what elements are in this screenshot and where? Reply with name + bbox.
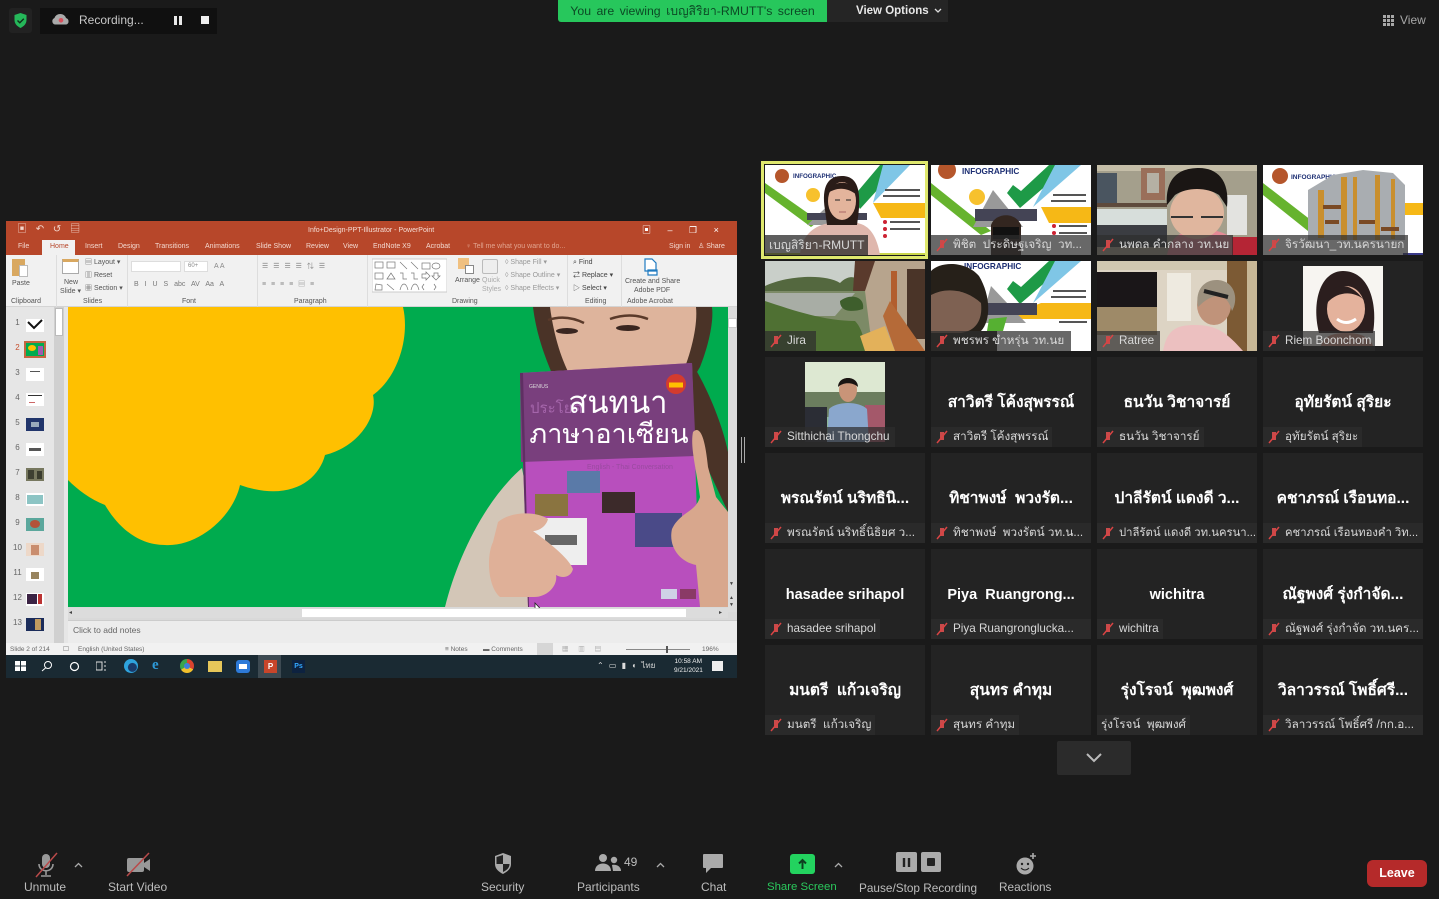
share screen button — [767, 854, 837, 893]
taskbar apps — [124, 655, 305, 678]
participants button — [577, 854, 640, 894]
ribbon tabs — [42, 240, 75, 255]
slide thumbnail list: 5 — [15, 418, 20, 427]
paragraph group — [257, 255, 367, 307]
tab labels: Sign in — [669, 243, 690, 250]
name label: คชาภรณ์ เรือนทองคำ วิท... — [1285, 527, 1418, 539]
name label — [931, 427, 1052, 447]
chat button — [701, 854, 726, 894]
display name: มนตรี แก้วเจริญ — [789, 682, 901, 699]
drawing group: ◊ Shape Effects ▾ — [505, 285, 559, 292]
slide thumbnail list: 4 — [15, 393, 20, 402]
name label — [931, 235, 1091, 255]
name label: Piya Ruangronglucka... — [953, 622, 1074, 635]
participants button: 49 — [624, 855, 637, 869]
slides group: Slides — [83, 298, 102, 305]
reactions button — [999, 853, 1051, 894]
name label: นพดล คำกลาง วท.นย — [1119, 238, 1229, 251]
status bar: English (United States) — [78, 646, 144, 653]
name label — [765, 523, 925, 543]
tile: สุนทร คำทุม — [931, 645, 1091, 735]
tile: เบญสิริยา-RMUTT: INFOGRAPHIC — [793, 173, 837, 180]
taskbar apps: Ps — [294, 663, 303, 670]
barcode label — [523, 518, 587, 565]
slide canvas: flower and woman holding book: English - Thai Conversation — [587, 464, 673, 471]
tab labels: Transitions — [155, 243, 189, 250]
tab labels: ♙ Share — [698, 243, 725, 250]
editing group: ▷ Select ▾ — [573, 285, 607, 292]
font group — [127, 255, 257, 307]
name label: วิลาวรรณ์ โพธิ์ศรี /กก.อ... — [1285, 718, 1414, 731]
tab labels: Acrobat — [426, 243, 450, 250]
clock — [674, 658, 703, 674]
tile: พชรพร ขำหรุ่น: INFOGRAPHIC — [964, 262, 1021, 271]
font group: B I U S abc AV Aa A — [134, 281, 224, 288]
thumbnail scrollbar — [54, 307, 64, 643]
clipboard group: Paste — [12, 280, 30, 287]
status bar: ▦ ▥ ▤ — [562, 646, 601, 653]
chat button: Chat — [701, 880, 726, 894]
tile: พชรพร ขำหรุ่น — [931, 261, 1091, 351]
adobe acrobat group: Adobe Acrobat — [627, 298, 673, 305]
name label: Riem Boonchom — [1285, 334, 1371, 347]
share chevron — [834, 862, 842, 868]
name label — [1097, 619, 1163, 639]
vertical slide scrollbar: ▼ — [729, 581, 734, 587]
tile: เบญสิริยา-RMUTT — [765, 165, 925, 255]
icon: stop recording — [201, 16, 209, 24]
font group: Font — [182, 298, 196, 305]
tile: hasadee srihapol — [765, 549, 925, 639]
tile: Ratree — [1097, 261, 1257, 351]
font group: 60+ — [188, 263, 198, 269]
icon: mouse cursor — [534, 602, 540, 608]
tile: ปาลีรัตน์ แดงดี — [1097, 453, 1257, 543]
clock: 10:58 AM — [675, 658, 702, 665]
vertical slide scrollbar: ▲ — [729, 595, 734, 601]
editing group: Editing — [585, 298, 606, 305]
tab labels: Review — [306, 243, 329, 250]
name label — [1263, 427, 1362, 447]
display name: hasadee srihapol — [786, 587, 904, 603]
clock: 9/21/2021 — [674, 667, 703, 674]
display name: ณัฐพงศ์ รุ่งกำจัด... — [1283, 586, 1403, 603]
horizontal slide scrollbar: ▸ — [719, 610, 722, 616]
taskbar apps: e — [152, 657, 159, 673]
recording status bar — [40, 8, 217, 34]
eyes — [556, 325, 640, 334]
pause/stop recording button — [859, 852, 977, 895]
font group: A A — [214, 263, 225, 270]
tile: ทิชาพงษ์ พวงรัต — [931, 453, 1091, 543]
view layout control — [1383, 13, 1426, 27]
name label: hasadee srihapol — [787, 622, 876, 635]
name label — [931, 523, 1091, 543]
tab labels: ♀ Tell me what you want to do... — [466, 243, 565, 250]
slide thumbnail list: 3 — [15, 368, 20, 377]
tile: ณัฐพงศ์ รุ่งกำจัด — [1263, 549, 1423, 639]
tile: Riem Boonchom — [1263, 261, 1423, 351]
name label — [931, 715, 1019, 735]
participants button: Participants — [577, 880, 640, 894]
editing group — [567, 255, 621, 307]
tile: wichitra — [1097, 549, 1257, 639]
tab labels: File — [18, 243, 29, 250]
name label — [765, 331, 816, 351]
horizontal slide scrollbar: ◂ — [69, 610, 72, 616]
name label — [1263, 715, 1423, 735]
hair — [533, 307, 712, 387]
screen sharing banner — [558, 0, 827, 22]
slide thumbnail list: 8 — [15, 493, 20, 502]
name label: ทิชาพงษ์ พวงรัตน์ วท.น... — [953, 526, 1083, 539]
recording label: Recording... — [79, 13, 144, 27]
display name: พรณรัตน์ นริทธินิ... — [781, 490, 909, 507]
adobe acrobat group: Create and Share — [625, 278, 680, 285]
display name: คชาภรณ์ เรือนทอ... — [1277, 490, 1409, 507]
name label — [1097, 235, 1233, 255]
system tray: ⌃ ▭ ▮ ◖ ไทย — [597, 661, 655, 670]
share screen button: Share Screen — [767, 881, 837, 893]
status bar: ≡ Notes — [445, 646, 468, 653]
tile: มนตรี แก้วเจริญ — [765, 645, 925, 735]
icon: recording cloud — [52, 14, 68, 24]
name label — [1263, 331, 1375, 351]
name label — [765, 715, 875, 735]
tab labels: Animations — [205, 243, 240, 250]
display name: wichitra — [1150, 587, 1204, 603]
title bar — [6, 221, 737, 255]
icon: search — [42, 661, 52, 672]
name label: ณัฐพงศ์ รุ่งกำจัด วท.นคร... — [1285, 622, 1419, 635]
name label: สุนทร คำทุม — [953, 718, 1015, 731]
name label: สาวิตรี โค้งสุพรรณ์ — [953, 430, 1048, 443]
editing group: ⇄ Replace ▾ — [573, 272, 613, 279]
tile: คชาภรณ์ เรือนทอ — [1263, 453, 1423, 543]
ribbon — [6, 255, 737, 307]
icon: cortana — [70, 662, 80, 672]
slides group: Slide ▾ — [60, 288, 81, 295]
name label — [765, 619, 880, 639]
paragraph group: ☰ ☰ ☰ ☰ ⇅ ☰ — [262, 263, 325, 270]
name label: Jira — [787, 334, 806, 347]
display name: ปาลีรัตน์ แดงดี ว... — [1115, 490, 1239, 507]
active speaker highlight — [761, 161, 928, 259]
tile: ธนวัน วิชาจารย์ — [1097, 357, 1257, 447]
notifications — [712, 661, 723, 671]
audio options chevron — [74, 862, 82, 868]
name label: Ratree — [1119, 334, 1154, 347]
name label: อุทัยรัตน์ สุริยะ — [1285, 430, 1358, 443]
tile: อุทัยรัตน์ สุริยะ — [1263, 357, 1423, 447]
notes pane — [68, 620, 737, 643]
tab labels: Slide Show — [256, 243, 291, 250]
name label: รุ่งโรจน์ พุฒพงศ์ — [1101, 718, 1186, 731]
name label — [1263, 619, 1423, 639]
display name: วิลาวรรณ์ โพธิ์ศรี... — [1278, 682, 1408, 699]
slide thumbnail list: 10 — [13, 543, 22, 552]
yellow flower shape — [68, 307, 405, 545]
display name: สาวิตรี โค้งสุพรรณ์ — [948, 394, 1074, 411]
slide canvas: flower and woman holding book: GENIUS — [529, 384, 549, 390]
slide thumbnail list: 9 — [15, 518, 20, 527]
vertical slide scrollbar — [728, 307, 737, 612]
tile: จิรวัฒนา — [1263, 165, 1423, 255]
slide thumbnail list: 11 — [13, 568, 22, 577]
icon: start — [15, 661, 26, 671]
name label: เบญสิริยา-RMUTT — [769, 238, 864, 252]
view options button: View Options — [856, 5, 929, 17]
windows taskbar — [6, 655, 737, 678]
shirt — [445, 468, 548, 607]
adobe acrobat group — [621, 255, 681, 307]
next page button — [1057, 741, 1131, 775]
reactions button: Reactions — [999, 880, 1051, 894]
name label — [931, 331, 1071, 351]
name label: Sitthichai Thongchu — [787, 430, 889, 443]
taskbar apps: P — [268, 662, 273, 671]
tile: พิชิต ประดิษฐเจริญ: INFOGRAPHIC — [962, 167, 1019, 176]
name label — [1263, 523, 1423, 543]
security button — [481, 853, 524, 894]
unmute button: Unmute — [24, 880, 66, 894]
leave button: Leave — [1379, 866, 1415, 880]
slide thumbnail list: 13 — [13, 618, 22, 627]
name label — [1097, 523, 1257, 543]
name label — [931, 619, 1091, 639]
tile: Jira — [765, 261, 925, 351]
window controls: ▣ – ❐ × — [642, 225, 719, 235]
tile: พรณรัตน์ นริทธินิ — [765, 453, 925, 543]
tile: นพดล คำกลาง — [1097, 165, 1257, 255]
tile: สาวิตรี โค้งสุพรรณ์ — [931, 357, 1091, 447]
drawing group — [367, 255, 564, 307]
tile: รุ่งโรจน์ พุฒพงศ์ — [1097, 645, 1257, 735]
status bar: ☐ — [63, 646, 69, 653]
book title: ประโยค — [530, 399, 583, 417]
left hand — [489, 513, 573, 597]
start video button: Start Video — [108, 880, 167, 894]
drawing group: ◊ Shape Outline ▾ — [505, 272, 560, 279]
status bar: ▬ Comments — [483, 646, 523, 653]
slides group — [56, 255, 126, 307]
slide thumbnail list: 6 — [15, 443, 20, 452]
slide thumbnail list: 1 — [15, 318, 20, 327]
name label — [1097, 427, 1204, 447]
quick access toolbar: ▣ ↶ ↺ ▤ — [17, 224, 80, 235]
drawing group: Styles — [482, 286, 501, 293]
slide workspace background — [68, 307, 737, 620]
paragraph group: Paragraph — [294, 298, 327, 305]
tab labels — [18, 242, 725, 250]
display name: ธนวัน วิชาจารย์ — [1124, 394, 1230, 411]
purple book — [520, 363, 700, 607]
slide thumbnail list — [13, 318, 46, 631]
name label — [1263, 235, 1408, 255]
unmute button — [24, 852, 66, 894]
status bar: 196% — [702, 646, 719, 653]
document title: Info+Design-PPT-Illustrator - PowerPoint — [308, 227, 434, 234]
display name: Piya Ruangrong... — [947, 587, 1075, 603]
slide thumbnail list: 2 — [15, 343, 20, 352]
slides group: ▤ Layout ▾ — [85, 259, 120, 266]
panel: slide thumbnails — [6, 307, 68, 643]
right hand — [671, 430, 728, 607]
display name: อุทัยรัตน์ สุริยะ — [1294, 394, 1392, 411]
drawing group: ◊ Shape Fill ▾ — [505, 259, 547, 266]
view layout control: View — [1400, 13, 1426, 27]
pause/stop recording button: Pause/Stop Recording — [859, 881, 977, 895]
tile: Piya Ruangrong — [931, 549, 1091, 639]
tab labels: View — [343, 243, 358, 250]
bottom toolbar — [24, 852, 1427, 895]
adobe acrobat group: Adobe PDF — [634, 287, 670, 294]
flags — [661, 589, 677, 599]
tab labels: Home — [50, 243, 69, 250]
name label: จิรวัฒนา_วท.นครนายก — [1285, 238, 1404, 251]
tab labels: Design — [118, 243, 140, 250]
status bar: Slide 2 of 214 — [10, 646, 50, 653]
slide canvas: flower and woman holding book: ภาษาอาเซียน — [529, 419, 689, 449]
panel: shared PowerPoint window — [6, 221, 737, 678]
name label: พชรพร ขำหรุ่น วท.นย — [953, 334, 1064, 347]
tile: Sitthichai Thongchu — [765, 357, 925, 447]
name label — [765, 427, 895, 447]
name label: พรณรัตน์ นริทธิ์นิธิยศ ว... — [787, 526, 915, 539]
horizontal slide scrollbar — [68, 608, 728, 618]
drawing group: Arrange — [455, 277, 480, 284]
slide thumbnail list: 7 — [15, 468, 20, 477]
icon: task view — [96, 662, 106, 670]
name label — [1097, 331, 1160, 351]
clipboard group: Clipboard — [11, 298, 41, 305]
braid — [688, 357, 728, 512]
display name: สุนทร คำทุม — [970, 682, 1052, 699]
splitter handle — [741, 437, 745, 463]
tab labels: EndNote X9 — [373, 243, 411, 250]
tile: วิลาวรรณ์ โพธิ์ศรี — [1263, 645, 1423, 735]
display name: ทิชาพงษ์ พวงรัต... — [949, 490, 1073, 507]
slide thumbnail list: 12 — [13, 593, 22, 602]
name label — [1097, 715, 1190, 735]
status bar — [6, 643, 737, 655]
paragraph group: ≡ ≡ ≡ ≡ ▤ ≡ — [262, 281, 314, 288]
tile: จิรวัฒนา: INFOGRAPHIC — [1291, 174, 1337, 181]
editing group: ⌕ Find — [573, 259, 592, 266]
slides group: ▦ Section ▾ — [85, 285, 123, 292]
name label: ปาลีรัตน์ แดงดี วท.นครนา... — [1119, 527, 1256, 539]
face — [550, 307, 696, 379]
slide canvas: flower and woman holding book: สนทนา — [568, 385, 668, 420]
screen sharing banner: You are viewing เบญสิริยา-RMUTT's screen — [570, 4, 815, 18]
tile: พิชิต ประดิษฐเจริญ — [931, 165, 1091, 255]
view options button — [827, 0, 948, 22]
start video button — [108, 852, 167, 894]
security button: Security — [481, 880, 524, 894]
book photos — [567, 471, 600, 493]
drawing group: Drawing — [452, 298, 478, 305]
slide canvas: flower and woman holding book — [68, 307, 728, 607]
slides group: New — [64, 279, 78, 286]
name label: มนตรี แก้วเจริญ — [787, 718, 871, 731]
vertical slide scrollbar: ▼ — [729, 602, 734, 608]
name label: ธนวัน วิชาจารย์ — [1119, 430, 1200, 443]
tab labels: Insert — [85, 243, 103, 250]
slides group: ▥ Reset — [85, 272, 112, 279]
leave button — [1367, 860, 1427, 887]
icon: pause recording — [174, 16, 182, 25]
name label: พิชิต ประดิษฐเจริญ วท... — [953, 238, 1082, 251]
security shield badge — [9, 8, 32, 33]
notes pane: Click to add notes — [73, 625, 141, 635]
name label — [765, 235, 868, 255]
display name: รุ่งโรจน์ พุฒพงศ์ — [1121, 682, 1233, 699]
clipboard group — [11, 259, 41, 305]
participants chevron — [656, 862, 664, 868]
name label: wichitra — [1119, 622, 1159, 635]
drawing group: Quick — [482, 277, 500, 284]
